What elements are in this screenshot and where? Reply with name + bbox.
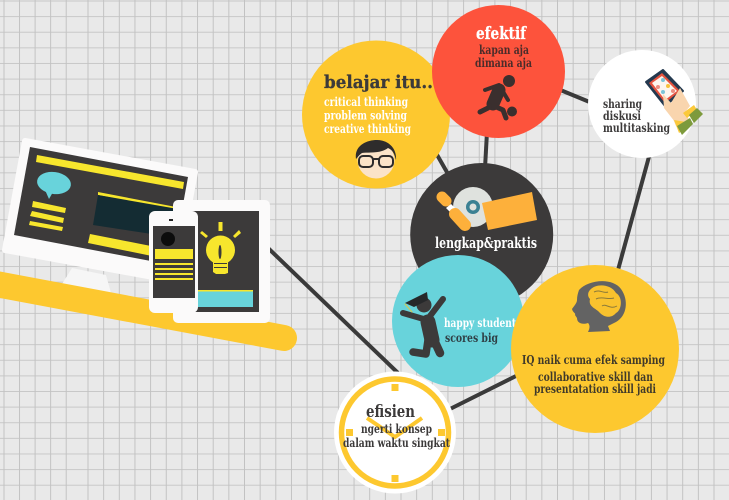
heading: efektif: efektif — [476, 24, 527, 44]
icon: face with glasses — [356, 140, 396, 178]
tablet — [173, 200, 270, 323]
text: lengkap dan praktis: lengkap&praktis — [435, 234, 537, 252]
icon: light bulb — [200, 222, 241, 274]
desk — [0, 281, 284, 338]
connector lines — [268, 89, 650, 409]
device group: monitor, desk, tablet, phone — [0, 141, 284, 338]
heading: efisien: efisien — [366, 402, 415, 422]
icon: jumping graduate — [403, 292, 443, 354]
icon: clock ticks and hands — [346, 384, 445, 482]
icon: hands holding tablet — [646, 70, 703, 135]
text: happy student: happy student — [444, 315, 516, 330]
text: collaborative and presentation skill: presentatation skill jadi — [534, 381, 656, 396]
text: kapan aja dimana aja — [475, 42, 532, 70]
panel: IQ naik — [511, 265, 679, 433]
text: ngerti konsep dalam waktu singkat — [343, 421, 450, 450]
text: sharing diskusi multitasking: diskusi — [603, 108, 641, 123]
panel: happy student — [392, 255, 524, 387]
icon: head with brain — [572, 281, 626, 332]
icon: disc, sleeve and usb — [442, 187, 537, 230]
text: collaborative and presentation skill: collaborative skill dan — [538, 369, 653, 384]
heading: belajar itu: belajar itu.. — [324, 72, 433, 93]
text: sharing diskusi multitasking — [603, 96, 670, 135]
panel: belajar itu — [302, 40, 450, 188]
icon: football player — [480, 75, 517, 118]
text: sharing diskusi multitasking: sharing — [603, 96, 642, 111]
text: ngerti konsep dalam waktu singkat: ngerti konsep — [361, 421, 432, 436]
panel: sharing — [588, 50, 703, 158]
monitor stand — [62, 268, 111, 293]
icon: speech bubble — [36, 170, 72, 199]
text: sharing diskusi multitasking: multitasking — [603, 120, 670, 135]
phone — [149, 211, 198, 313]
text: kapan aja dimana aja: dimana aja — [475, 55, 532, 70]
text: thinking skills: critical thinking — [324, 94, 408, 109]
panel: lengkap dan praktis — [410, 163, 553, 306]
panel: efisien clock — [334, 372, 456, 494]
text: scores big: scores big — [445, 330, 498, 345]
text: kapan aja dimana aja: kapan aja — [479, 42, 529, 57]
text: collaborative and presentation skill — [534, 369, 656, 396]
text: ngerti konsep dalam waktu singkat: dalam waktu singkat — [343, 435, 450, 450]
text: thinking skills — [324, 94, 411, 136]
text: IQ naik cuma efek samping: IQ naik cuma efek samping — [522, 352, 665, 367]
monitor — [5, 141, 195, 281]
panel: efektif — [432, 5, 565, 138]
text: thinking skills: problem solving — [324, 108, 407, 122]
text: thinking skills: creative thinking — [324, 121, 411, 136]
